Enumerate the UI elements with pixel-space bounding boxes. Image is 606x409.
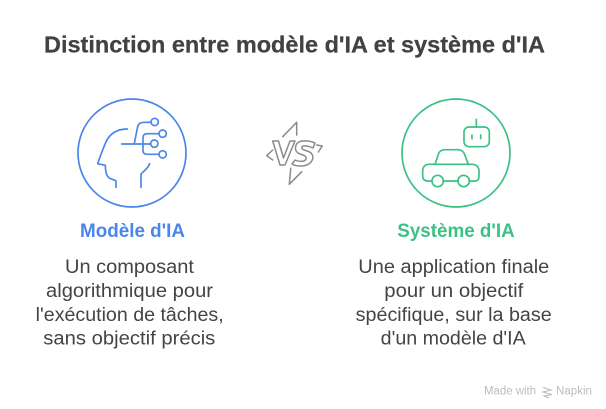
- watermark: made with Napkin: [484, 386, 592, 398]
- description: système d'IA: pour un objectif: [384, 280, 524, 302]
- panel: système d'IA: [356, 99, 552, 350]
- description: modèle d'IA: algorithmique pour: [46, 280, 213, 302]
- description: système d'IA: spécifique, sur la base: [356, 304, 552, 326]
- description: modèle d'IA: Un composant: [65, 256, 195, 278]
- description: système d'IA: Une application finale: [358, 256, 549, 278]
- description: système d'IA: [356, 256, 552, 350]
- icon: napkin logo: [543, 388, 552, 398]
- watermark: made with Napkin: Napkin: [556, 386, 592, 398]
- heading: modèle d'IA: Modèle d'IA: [80, 221, 185, 242]
- panel: modèle d'IA: [36, 99, 224, 350]
- icon: car and robot: [402, 99, 510, 207]
- heading: système d'IA: Système d'IA: [397, 221, 515, 242]
- icon: VS lightning: [267, 122, 322, 184]
- description: système d'IA: d'un modèle d'IA: [381, 328, 527, 350]
- description: modèle d'IA: [36, 256, 224, 350]
- description: modèle d'IA: sans objectif précis: [43, 328, 216, 350]
- watermark: made with Napkin: Made with: [484, 386, 536, 398]
- description: modèle d'IA: l'exécution de tâches,: [36, 304, 224, 326]
- title: Distinction entre modèle d'IA et système d'IA: [44, 32, 545, 58]
- icon: head with neural network: [78, 99, 186, 207]
